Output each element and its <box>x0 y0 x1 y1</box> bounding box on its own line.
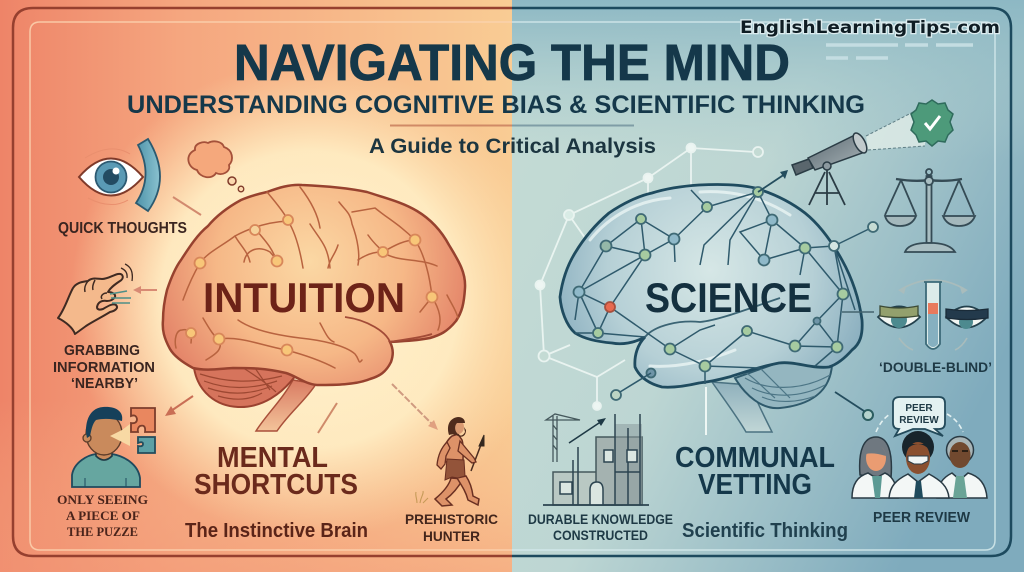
icon: double-blind <box>878 280 988 350</box>
network nodes <box>574 187 878 400</box>
label: grabbing information nearby: ‘NEARBY’ <box>71 375 138 392</box>
intuition brain <box>163 185 465 431</box>
arrow: brain to telescope <box>758 170 788 192</box>
connector: communal vetting <box>705 387 707 435</box>
cerebellum <box>194 364 296 407</box>
heading: communal vetting: VETTING <box>698 469 812 501</box>
synapse nodes <box>186 215 438 356</box>
divider <box>390 124 512 126</box>
brain label: science: SCIENCE <box>645 274 812 321</box>
white network <box>536 144 763 410</box>
heading: communal vetting <box>675 442 835 501</box>
label: grabbing information nearby: GRABBING <box>64 342 140 359</box>
temporal lobe fold <box>645 298 780 337</box>
arrow: to hand <box>133 286 157 294</box>
connector: mental shortcuts <box>318 403 337 433</box>
cerebrum <box>560 184 862 387</box>
icon: peer review speech bubble: PEER <box>905 403 933 414</box>
cerebellum <box>735 362 832 408</box>
label: only seeing a piece of the puzze: ONLY SEEING <box>57 493 148 507</box>
spear <box>471 442 482 471</box>
heading: communal vetting: COMMUNAL <box>675 442 835 474</box>
head <box>452 420 464 434</box>
connector: quick thoughts <box>173 197 201 215</box>
subheading: the instinctive brain: The Instinctive Brain <box>185 520 368 542</box>
outer frame right <box>512 8 1011 556</box>
title: NAVIGATING THE MIND <box>234 34 790 91</box>
label: durable knowledge constructed: DURABLE KNOWLEDGE <box>528 511 673 527</box>
hair and beard <box>448 417 466 437</box>
inner frame right <box>512 22 995 550</box>
grass tuft <box>416 491 428 503</box>
icon: telescope with badge <box>792 100 953 205</box>
back leg <box>435 478 463 506</box>
label: prehistoric hunter: HUNTER <box>423 528 480 544</box>
cerebrum <box>163 185 465 385</box>
connector: peer review <box>835 392 873 420</box>
label: durable knowledge constructed: CONSTRUCTED <box>553 527 648 543</box>
brain stem <box>256 380 316 431</box>
subtitle: UNDERSTANDING COGNITIVE BIAS & SCIENTIFIC THINKING <box>127 91 865 119</box>
icon: eye with shield <box>79 139 160 211</box>
panel: intuition background <box>0 0 512 572</box>
decorative dashes top right <box>826 45 973 58</box>
label: grabbing information nearby <box>53 342 155 392</box>
heading: mental shortcuts <box>194 442 358 501</box>
label: durable knowledge constructed <box>528 511 673 543</box>
icon: thought cloud <box>188 141 244 192</box>
scientist left <box>852 437 898 498</box>
inner frame left <box>30 22 512 550</box>
highlight <box>590 192 790 366</box>
dashed arrow: to hunter <box>392 384 438 430</box>
subheading: scientific thinking: Scientific Thinking <box>682 520 848 542</box>
label: peer review: PEER REVIEW <box>873 510 970 526</box>
arrow: to person <box>165 396 193 416</box>
arms <box>437 441 476 469</box>
icon: scales <box>885 169 975 252</box>
front leg <box>457 476 479 505</box>
heading: mental shortcuts: SHORTCUTS <box>194 469 358 501</box>
divider right <box>512 124 634 126</box>
label: only seeing a piece of the puzze: A PIECE OF <box>66 509 140 523</box>
icon: three scientists <box>852 431 987 498</box>
sulci <box>175 187 458 368</box>
tagline: A Guide to Critical Analysis <box>369 134 656 158</box>
icon: prehistoric hunter <box>416 417 484 506</box>
scientist center <box>889 431 949 498</box>
label: prehistoric hunter <box>405 511 498 544</box>
spear head <box>479 435 484 446</box>
science brain <box>560 184 878 432</box>
scientist right <box>937 436 987 498</box>
watermark: EnglishLearningTips.com <box>740 18 1000 38</box>
icon: peer review speech bubble <box>876 397 963 436</box>
temporal lobe fold <box>345 317 432 342</box>
panel: science background <box>512 0 1024 572</box>
label: only seeing a piece of the puzze <box>57 493 148 539</box>
neural network lines <box>575 190 873 384</box>
label: double-blind: ‘DOUBLE-BLIND’ <box>879 359 992 375</box>
brain label: intuition: INTUITION <box>203 274 405 321</box>
label: quick thoughts: QUICK THOUGHTS <box>58 220 187 237</box>
label: prehistoric hunter: PREHISTORIC <box>405 511 498 527</box>
connector: lower left node <box>620 373 651 392</box>
label: grabbing information nearby: INFORMATION <box>53 359 155 376</box>
icon: building under construction <box>543 414 649 505</box>
skirt <box>445 459 465 480</box>
torso <box>442 434 463 462</box>
icon: peer review speech bubble: REVIEW <box>899 415 939 426</box>
icon: person with puzzle <box>72 407 155 487</box>
outer frame left <box>13 8 512 556</box>
brain stem <box>712 382 772 432</box>
label: only seeing a piece of the puzze: THE PUZZE <box>67 525 138 539</box>
icon: grabbing hand <box>58 264 132 334</box>
heading: mental shortcuts: MENTAL <box>217 442 328 474</box>
connector: double-blind <box>842 311 874 313</box>
